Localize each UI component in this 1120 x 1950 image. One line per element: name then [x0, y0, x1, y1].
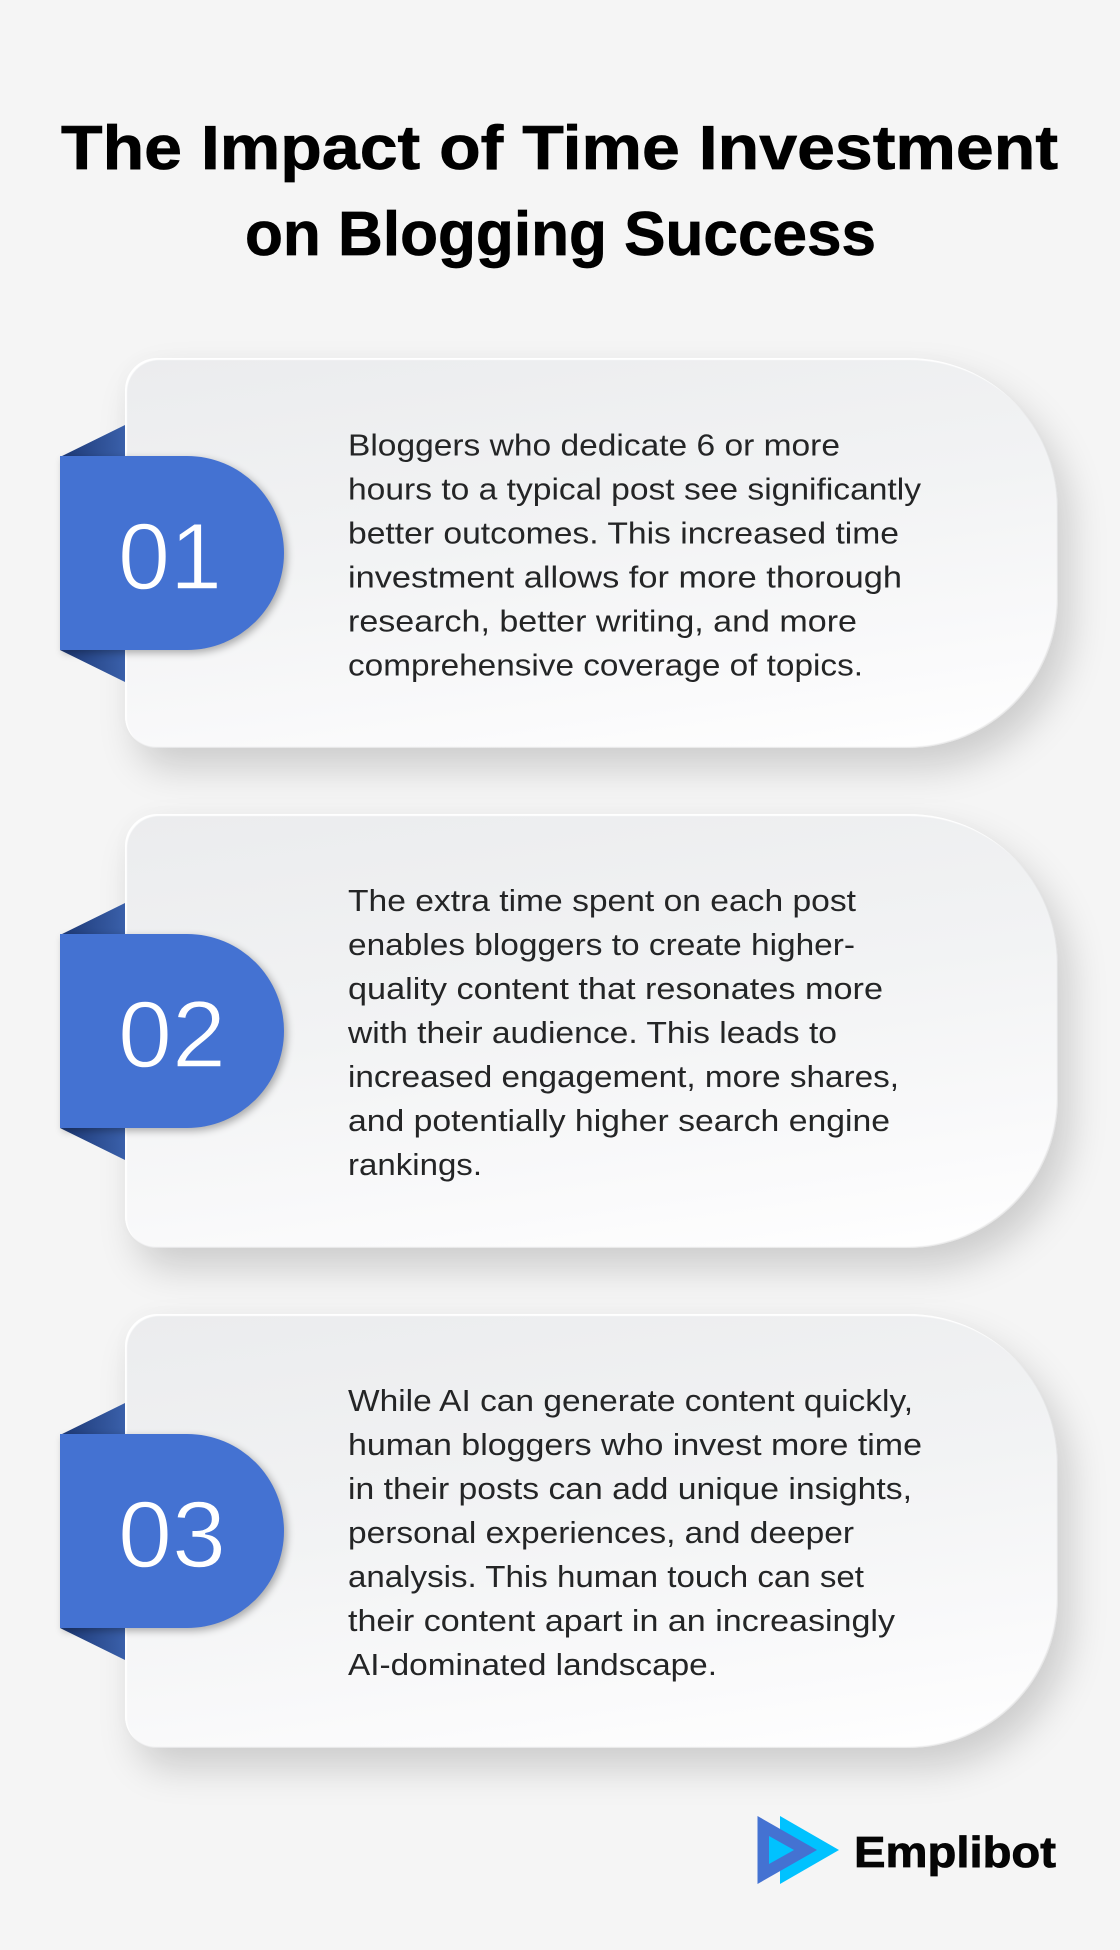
text block 02: The extra time spent on each post	[348, 884, 857, 918]
title: The Impact of Time Investment	[61, 114, 1058, 183]
number badge 03	[60, 1434, 284, 1628]
text block 03: While AI can generate content quickly,	[348, 1384, 913, 1418]
card background 02	[124, 814, 1058, 1248]
text block 02: with their audience. This leads to	[347, 1016, 837, 1050]
text block 01: Bloggers who dedicate 6 or more	[348, 428, 840, 462]
panel: step 02	[58, 814, 1085, 1283]
number badge 01	[60, 456, 284, 650]
text block 03: AI-dominated landscape.	[348, 1648, 717, 1682]
ribbon fold bottom 03	[60, 1628, 125, 1660]
number badge 02	[60, 934, 284, 1128]
number badge 01: 01	[118, 504, 222, 610]
icon: play triangles	[758, 1816, 839, 1884]
text block 02: enables bloggers to create higher-	[348, 928, 855, 962]
logo: Emplibot	[758, 1816, 1056, 1884]
ribbon fold bottom 02	[60, 1128, 125, 1160]
ribbon fold top 01	[62, 425, 125, 456]
number badge 03: 03	[118, 1482, 226, 1588]
text block 01: better outcomes. This increased time	[348, 516, 899, 550]
number badge 02: 02	[118, 982, 226, 1088]
ribbon fold top 03	[62, 1403, 125, 1434]
panel: step 01	[58, 358, 1085, 783]
title	[61, 114, 1058, 269]
text block 03	[348, 1384, 922, 1682]
text block 02: and potentially higher search engine	[348, 1104, 890, 1138]
card background 03	[124, 1314, 1058, 1748]
ribbon fold bottom 01	[60, 650, 125, 682]
ribbon fold top 02	[62, 903, 125, 934]
wordmark: Emplibot	[854, 1828, 1056, 1877]
text block 01: investment allows for more thorough	[348, 560, 902, 594]
card background 01	[124, 358, 1058, 748]
text block 02: rankings.	[348, 1148, 482, 1182]
text block 03: their content apart in an increasingly	[348, 1604, 896, 1638]
text block 02: increased engagement, more shares,	[348, 1060, 899, 1094]
text block 03: in their posts can add unique insights,	[348, 1472, 912, 1506]
text block 01	[348, 428, 922, 682]
text block 02: quality content that resonates more	[348, 972, 883, 1006]
panel: step 03	[58, 1314, 1085, 1783]
text block 03: analysis. This human touch can set	[348, 1560, 865, 1594]
text block 03: human bloggers who invest more time	[348, 1428, 922, 1462]
text block 01: comprehensive coverage of topics.	[348, 648, 863, 682]
text block 01: hours to a typical post see significantly	[348, 472, 922, 506]
text block 01: research, better writing, and more	[348, 604, 857, 638]
title: on Blogging Success	[245, 200, 876, 269]
text block 03: personal experiences, and deeper	[348, 1516, 854, 1550]
text block 02	[347, 884, 899, 1182]
